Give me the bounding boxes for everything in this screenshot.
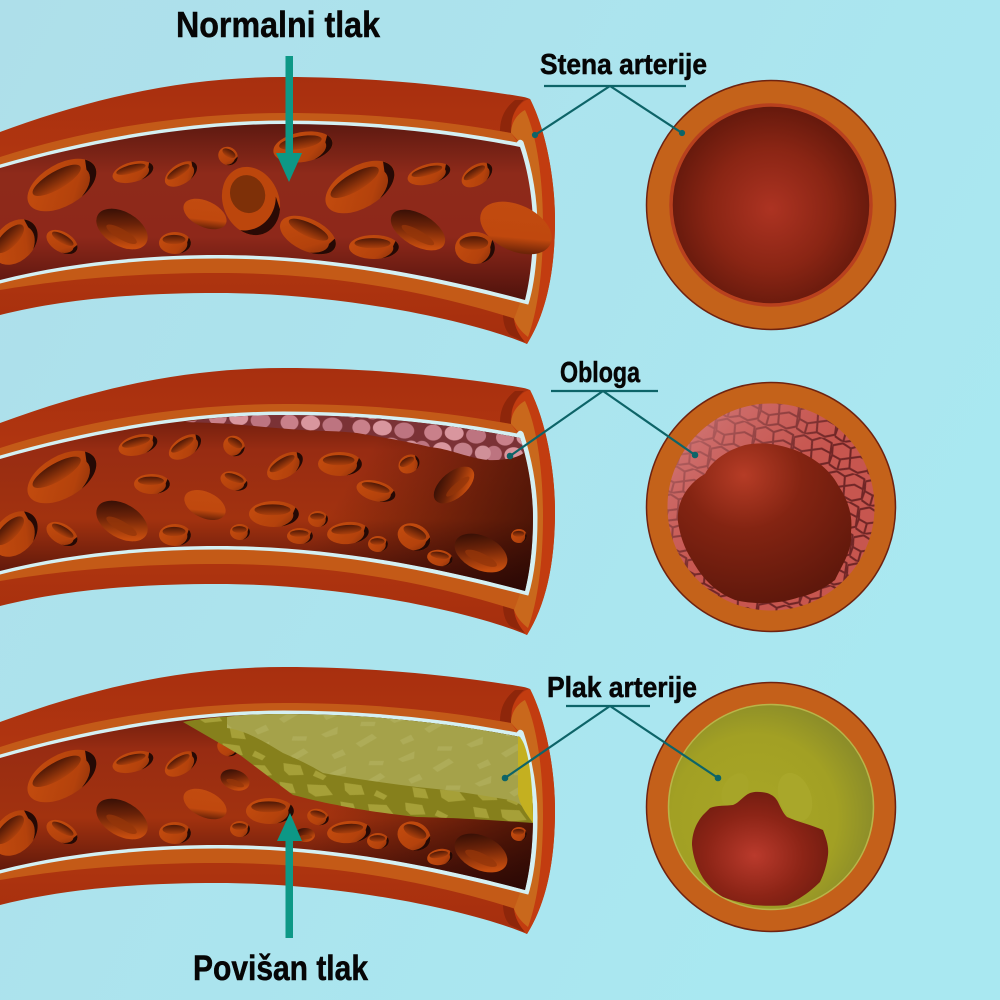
red blood cells bbox=[0, 742, 527, 872]
arrow: normal pressure down bbox=[276, 56, 302, 182]
panel: normal artery lengthwise bbox=[0, 77, 560, 344]
plaque upper layer bbox=[227, 714, 522, 806]
cross-section: artery with plaque bbox=[646, 682, 896, 932]
artery wall bbox=[0, 667, 555, 934]
plaque lower layer bbox=[183, 714, 533, 823]
label: plaque: Plak arterije bbox=[547, 672, 697, 704]
narrowed lumen bbox=[678, 443, 851, 603]
label: lining: Obloga bbox=[560, 357, 641, 389]
callout lines: artery wall bbox=[533, 86, 686, 137]
cross-section: normal artery bbox=[646, 80, 896, 330]
plaque ring bbox=[668, 704, 874, 910]
narrowed lumen bbox=[692, 792, 828, 906]
outer ring bbox=[646, 382, 896, 632]
fatty lining bbox=[185, 415, 525, 460]
panel: artery with lining lengthwise bbox=[0, 368, 555, 635]
plaque end face bbox=[518, 736, 533, 823]
panel: artery with plaque lengthwise bbox=[0, 667, 555, 934]
artery wall bbox=[0, 368, 555, 635]
red blood cells bbox=[0, 127, 497, 274]
title: high pressure: Povišan tlak bbox=[193, 949, 368, 988]
arrow: high pressure up bbox=[277, 813, 302, 938]
callout lines: lining bbox=[508, 391, 697, 458]
lining cells bbox=[668, 404, 874, 610]
callout lines: plaque bbox=[503, 706, 720, 780]
open lumen bbox=[671, 105, 871, 305]
lumen with blood bbox=[0, 714, 533, 890]
outer ring bbox=[646, 682, 896, 932]
title: normal pressure: Normalni tlak bbox=[176, 4, 381, 45]
lumen with blood bbox=[0, 124, 533, 300]
outer ring bbox=[646, 80, 896, 330]
lumen with blood bbox=[0, 415, 533, 591]
label: artery wall: Stena arterije bbox=[540, 49, 707, 81]
red blood cells bbox=[0, 429, 527, 580]
artery wall bbox=[0, 77, 555, 344]
cross-section: artery with lining bbox=[646, 382, 896, 632]
escaping blood cell bbox=[472, 191, 560, 265]
